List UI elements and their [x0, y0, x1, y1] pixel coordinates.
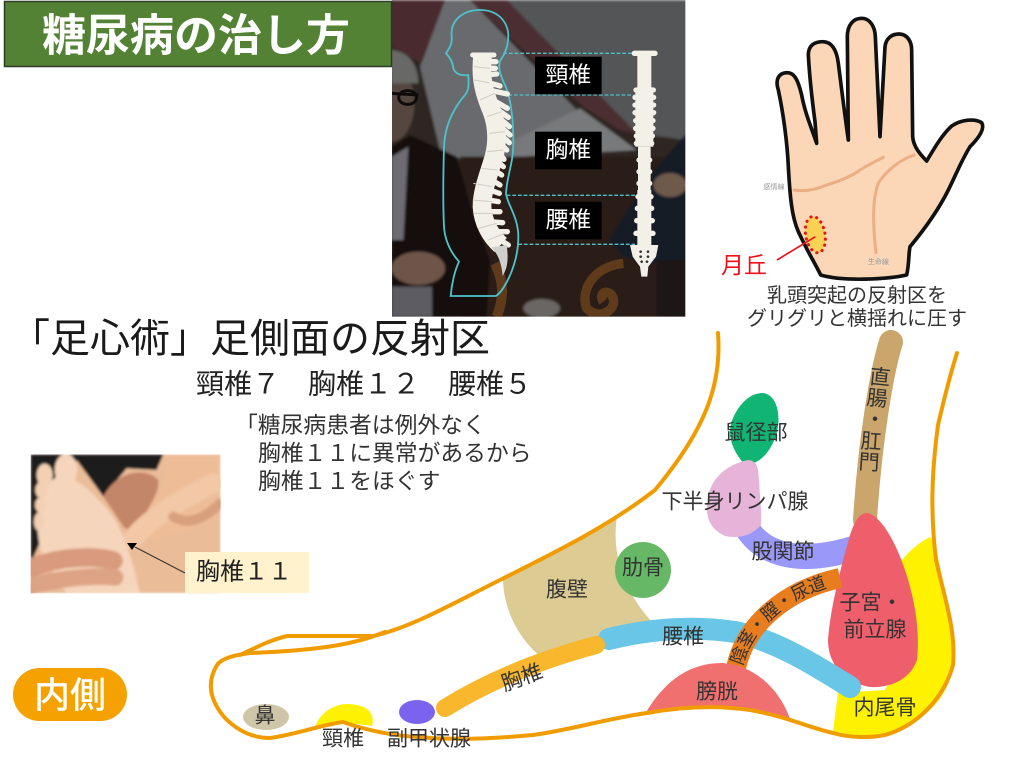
moon mound marker [803, 215, 828, 254]
section heading: 「足心術」足側面の反射区 [10, 317, 490, 361]
side view spine [473, 55, 510, 245]
zone labels: 門 [858, 451, 880, 475]
zone labels: 前立腺 [844, 618, 906, 642]
label: lumbar [535, 202, 602, 239]
zone labels: 鼠径部 [724, 422, 788, 444]
quote: 「糖尿病患者は例外なく [235, 412, 486, 438]
zone labels: 腹壁 [546, 578, 588, 602]
label: thoracic: 胸椎 [546, 137, 591, 163]
zone: bladder [645, 663, 790, 719]
zone labels: 股関節 [752, 540, 814, 564]
life line label: 生命線 [868, 257, 889, 266]
zone: cervical [315, 704, 373, 727]
callout: thoracic 11 [127, 543, 309, 593]
foot outline [211, 333, 957, 739]
arrow to point on foot [127, 543, 185, 573]
label: cervical [535, 57, 602, 94]
quote: 胸椎１１に異常があるから [258, 440, 532, 466]
hand caption: グリグリと横揺れに圧す [747, 307, 967, 330]
zone: thoracic [445, 645, 596, 708]
zone labels: 子宮・ [840, 592, 902, 614]
zone labels: 肛 [860, 430, 882, 454]
hand illustration [721, 18, 983, 279]
vertebrae count: 頸椎７ 胸椎１２ 腰椎５ [196, 368, 532, 400]
zone labels: 胸椎 [498, 660, 546, 696]
zone labels: 肋骨 [622, 556, 664, 580]
zone: nose [243, 704, 289, 730]
background photo [369, 0, 690, 320]
zone: uterus and prostate [828, 513, 918, 687]
zone labels: 膀胱 [696, 680, 738, 704]
zone labels: 陰茎・膣・尿道 [729, 574, 827, 666]
quote [235, 412, 532, 494]
zone labels: 副甲状腺 [387, 728, 471, 750]
foot massage photo [31, 454, 221, 593]
zone labels: 直 [868, 365, 892, 391]
label: cervical: 頸椎 [546, 62, 591, 88]
coccyx [492, 245, 508, 276]
zone: urethra [736, 578, 840, 668]
label: thoracic [535, 132, 602, 169]
zone labels: 内尾骨 [854, 696, 916, 720]
zone: hip joint [748, 530, 855, 556]
zone: inguinal [730, 393, 778, 465]
zone labels: ・ [864, 408, 886, 432]
hand outline [777, 18, 983, 279]
heart line [794, 157, 883, 191]
zone: parathyroid [399, 700, 435, 724]
zone: rectum and anus [865, 342, 891, 520]
hand caption: 乳頭突起の反射区を [767, 284, 947, 307]
moon mound leader [777, 237, 815, 260]
moon mound label: 月丘 [721, 252, 767, 278]
hand caption [747, 284, 967, 330]
zone labels: 腰椎 [662, 626, 704, 648]
title banner [4, 2, 392, 66]
chair scroll [585, 263, 623, 314]
zone labels: 頸椎 [322, 728, 364, 750]
dashed guide lines [503, 53, 635, 244]
zone: lower body lymph [707, 460, 761, 537]
photo panel: spine diagram over dim photo [369, 0, 690, 320]
glasses on person [392, 91, 418, 104]
front view spine [630, 53, 658, 277]
zone: lumbar [609, 629, 850, 687]
zone labels [254, 365, 916, 750]
body silhouette outline [443, 10, 518, 296]
zone: ribs [615, 542, 671, 598]
quote: 胸椎１１をほぐす [258, 468, 440, 494]
zone: abdominal wall [503, 517, 655, 656]
zone: coccyx [833, 537, 953, 737]
heart line label: 感情線 [764, 182, 784, 191]
zone labels: 下半身リンパ腺 [662, 490, 808, 514]
label: lumbar: 腰椎 [546, 207, 591, 233]
zone labels: 腸 [865, 386, 889, 412]
title banner: 糖尿病の治し方 [42, 12, 350, 60]
callout: thoracic 11: 胸椎１１ [196, 558, 292, 586]
zone labels: 鼻 [254, 704, 276, 728]
sacrum holes [639, 250, 649, 263]
inner side badge [13, 668, 127, 721]
foot reflex diagram [208, 330, 960, 750]
inner side badge: 内側 [34, 674, 106, 716]
life line [874, 155, 914, 253]
